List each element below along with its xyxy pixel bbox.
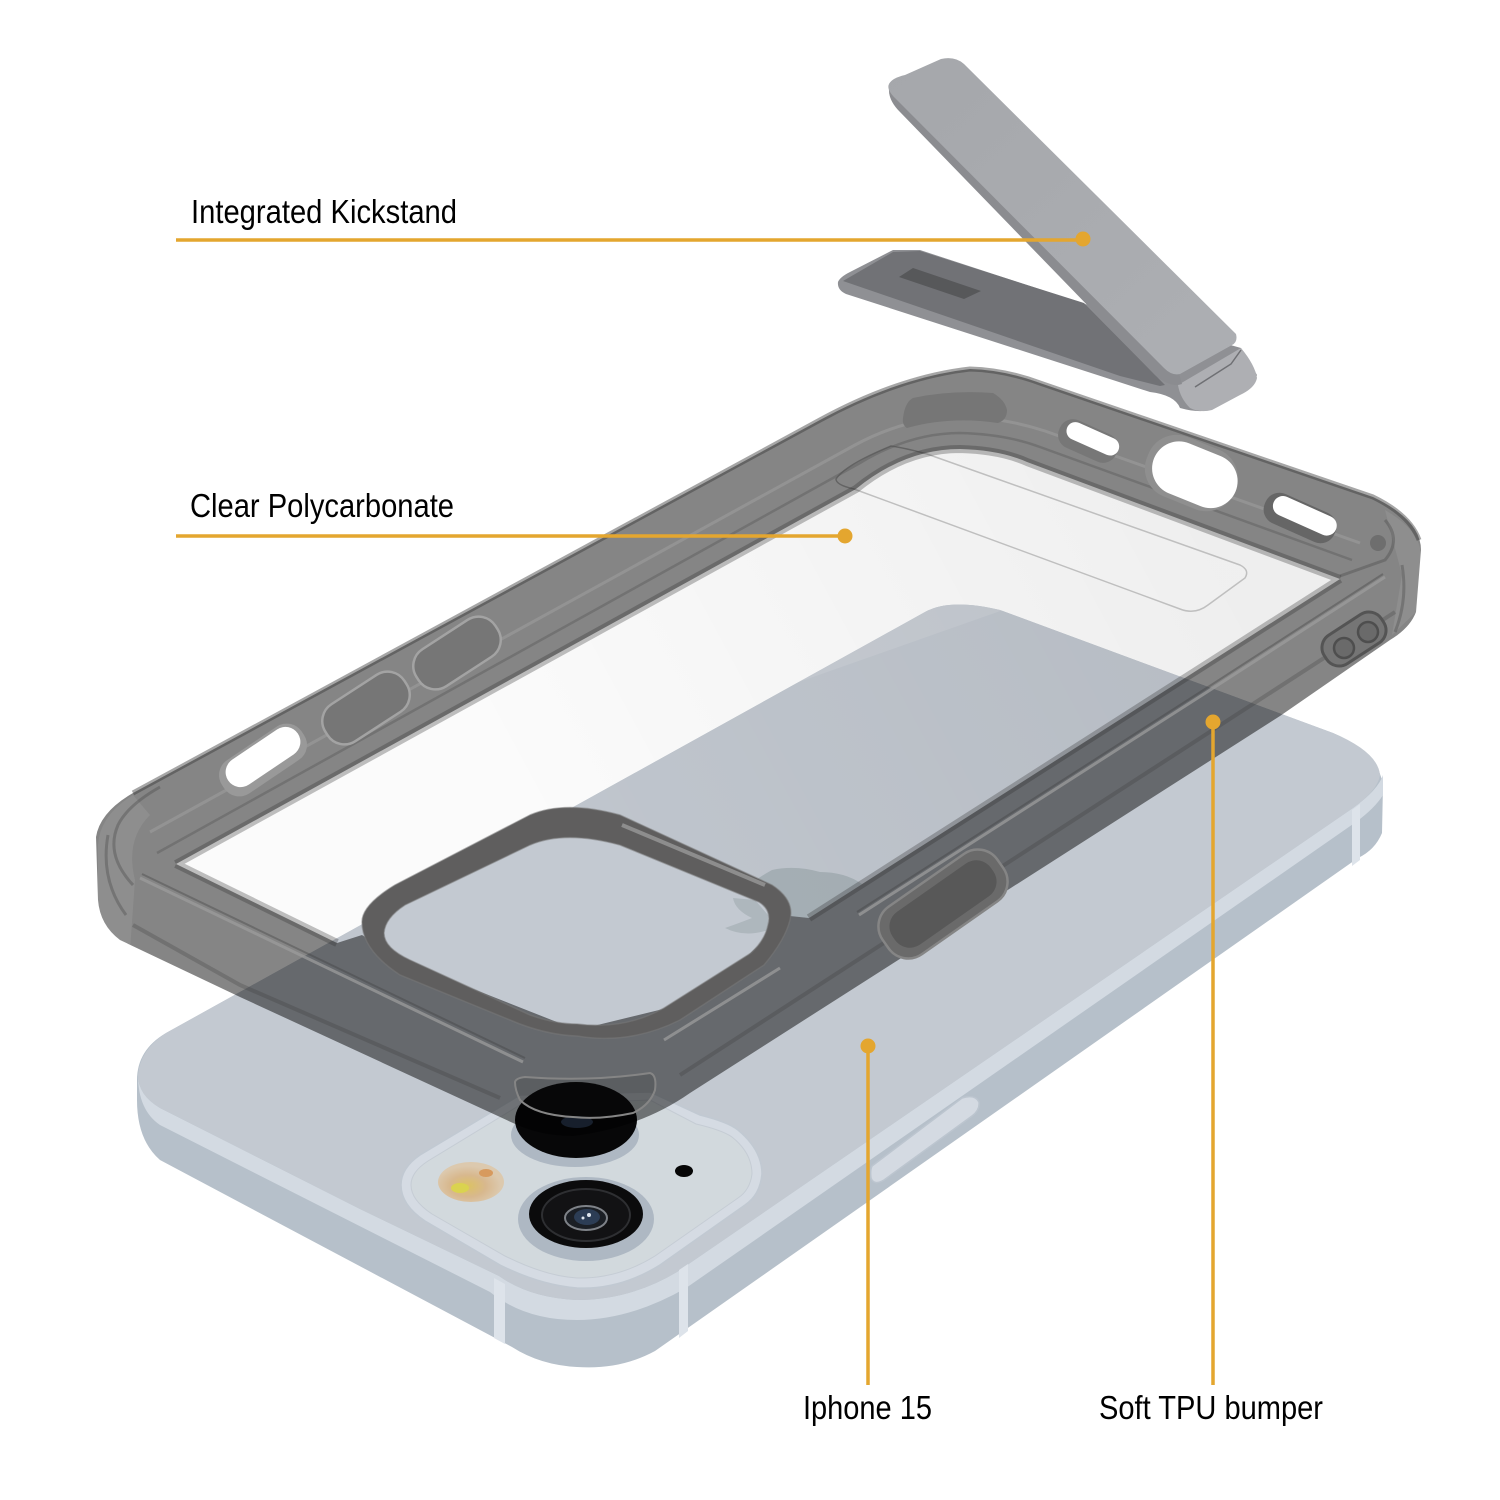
case frame step lines — [157, 433, 1352, 853]
callout: clear polycarbonate — [176, 487, 852, 544]
callout: iphone 15 — [803, 1038, 932, 1426]
callout: soft tpu bumper — [1099, 714, 1323, 1426]
phone sheen — [540, 604, 1006, 820]
raised plate side — [889, 88, 1182, 385]
callout: clear polycarbonate: Clear Polycarbonate — [190, 487, 454, 524]
kickstand recess — [836, 446, 1247, 611]
side button — [871, 1097, 979, 1183]
hinge block — [1178, 348, 1257, 411]
case outer top edge — [133, 369, 1419, 793]
lower band highlight lines — [140, 577, 1385, 1062]
raised plate top — [888, 58, 1236, 374]
bottom port recess — [515, 1073, 655, 1118]
main lens — [518, 1177, 654, 1261]
case inner rim — [176, 449, 1340, 943]
callout: soft tpu bumper: Soft TPU bumper — [1099, 1389, 1323, 1426]
volume button covers — [315, 609, 508, 752]
camera port cutout — [1136, 426, 1247, 520]
flash cutout — [1259, 488, 1341, 548]
mic dot — [675, 1165, 693, 1177]
right corner detail — [1340, 510, 1421, 635]
callout: integrated kickstand: Integrated Kickstand — [191, 193, 457, 230]
right button cover — [1316, 606, 1392, 672]
upper lens — [511, 1082, 639, 1167]
phone bevel — [138, 775, 1383, 1320]
phone back surface — [138, 604, 1380, 1300]
camera opening — [384, 838, 769, 1025]
base edge — [838, 250, 1257, 411]
tpu and polycarbonate case frame — [96, 369, 1421, 1136]
microphone cutout — [1054, 415, 1122, 467]
side button cover — [869, 840, 1017, 968]
base slot — [899, 268, 981, 299]
clear polycarbonate panel — [176, 449, 1340, 1030]
apple logo — [725, 868, 862, 934]
top port recess — [903, 392, 1007, 428]
callout: integrated kickstand — [176, 193, 1090, 246]
flash — [438, 1162, 504, 1202]
integrated kickstand — [838, 58, 1257, 411]
base top face — [843, 251, 1165, 386]
camera module — [401, 1082, 762, 1288]
antenna stripes — [494, 804, 1360, 1344]
left switch cutout — [212, 717, 314, 803]
callout: iphone 15: Iphone 15 — [803, 1389, 932, 1426]
camera cutout ring — [362, 808, 791, 1038]
left corner detail — [98, 787, 160, 950]
